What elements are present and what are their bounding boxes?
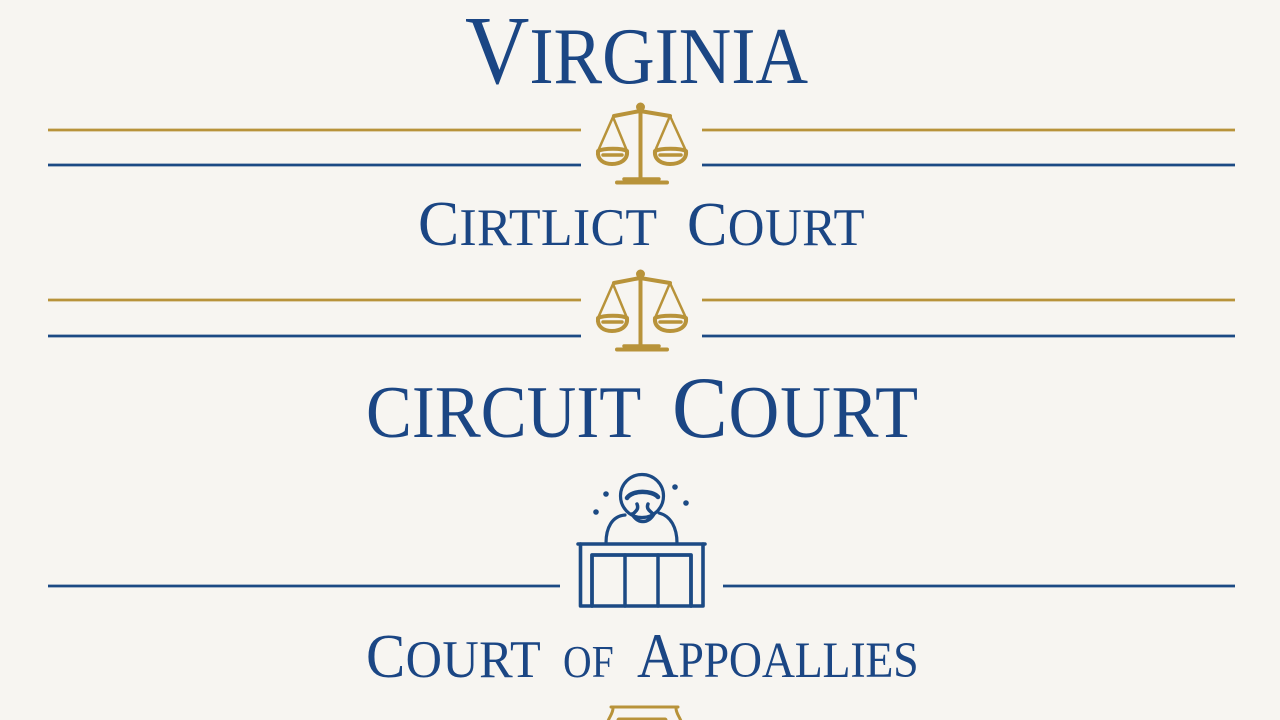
- heading: Circuit Court: [366, 359, 918, 456]
- heading: Court of Appoallies: APPOALLIES: [637, 621, 919, 692]
- icon: scales of justice 1: [598, 104, 686, 182]
- divider: blue rule beside judge: [48, 585, 1235, 587]
- heading: Circuit Court: COURT: [672, 359, 918, 456]
- heading: Court of Appoallies: OF: [563, 637, 614, 688]
- heading: Cirtlict Court: [418, 189, 865, 259]
- heading: Court of Appoallies: COURT: [366, 623, 541, 691]
- icon: gold bench, cropped at bottom: [608, 707, 681, 720]
- icon: judge at bench: [578, 474, 705, 606]
- heading: Court of Appoallies: [366, 621, 919, 692]
- title: Virginia: VIRGINIA: [465, 0, 808, 105]
- icon: scales of justice 2: [598, 271, 686, 350]
- heading: Cirtlict Court: COURT: [687, 190, 865, 259]
- heading: Cirtlict Court: CIRTLICT: [418, 189, 657, 259]
- divider: first gold and blue rules: [48, 130, 1235, 165]
- divider: second gold and blue rules: [48, 300, 1235, 336]
- heading: Circuit Court: CIRCUIT: [366, 372, 641, 454]
